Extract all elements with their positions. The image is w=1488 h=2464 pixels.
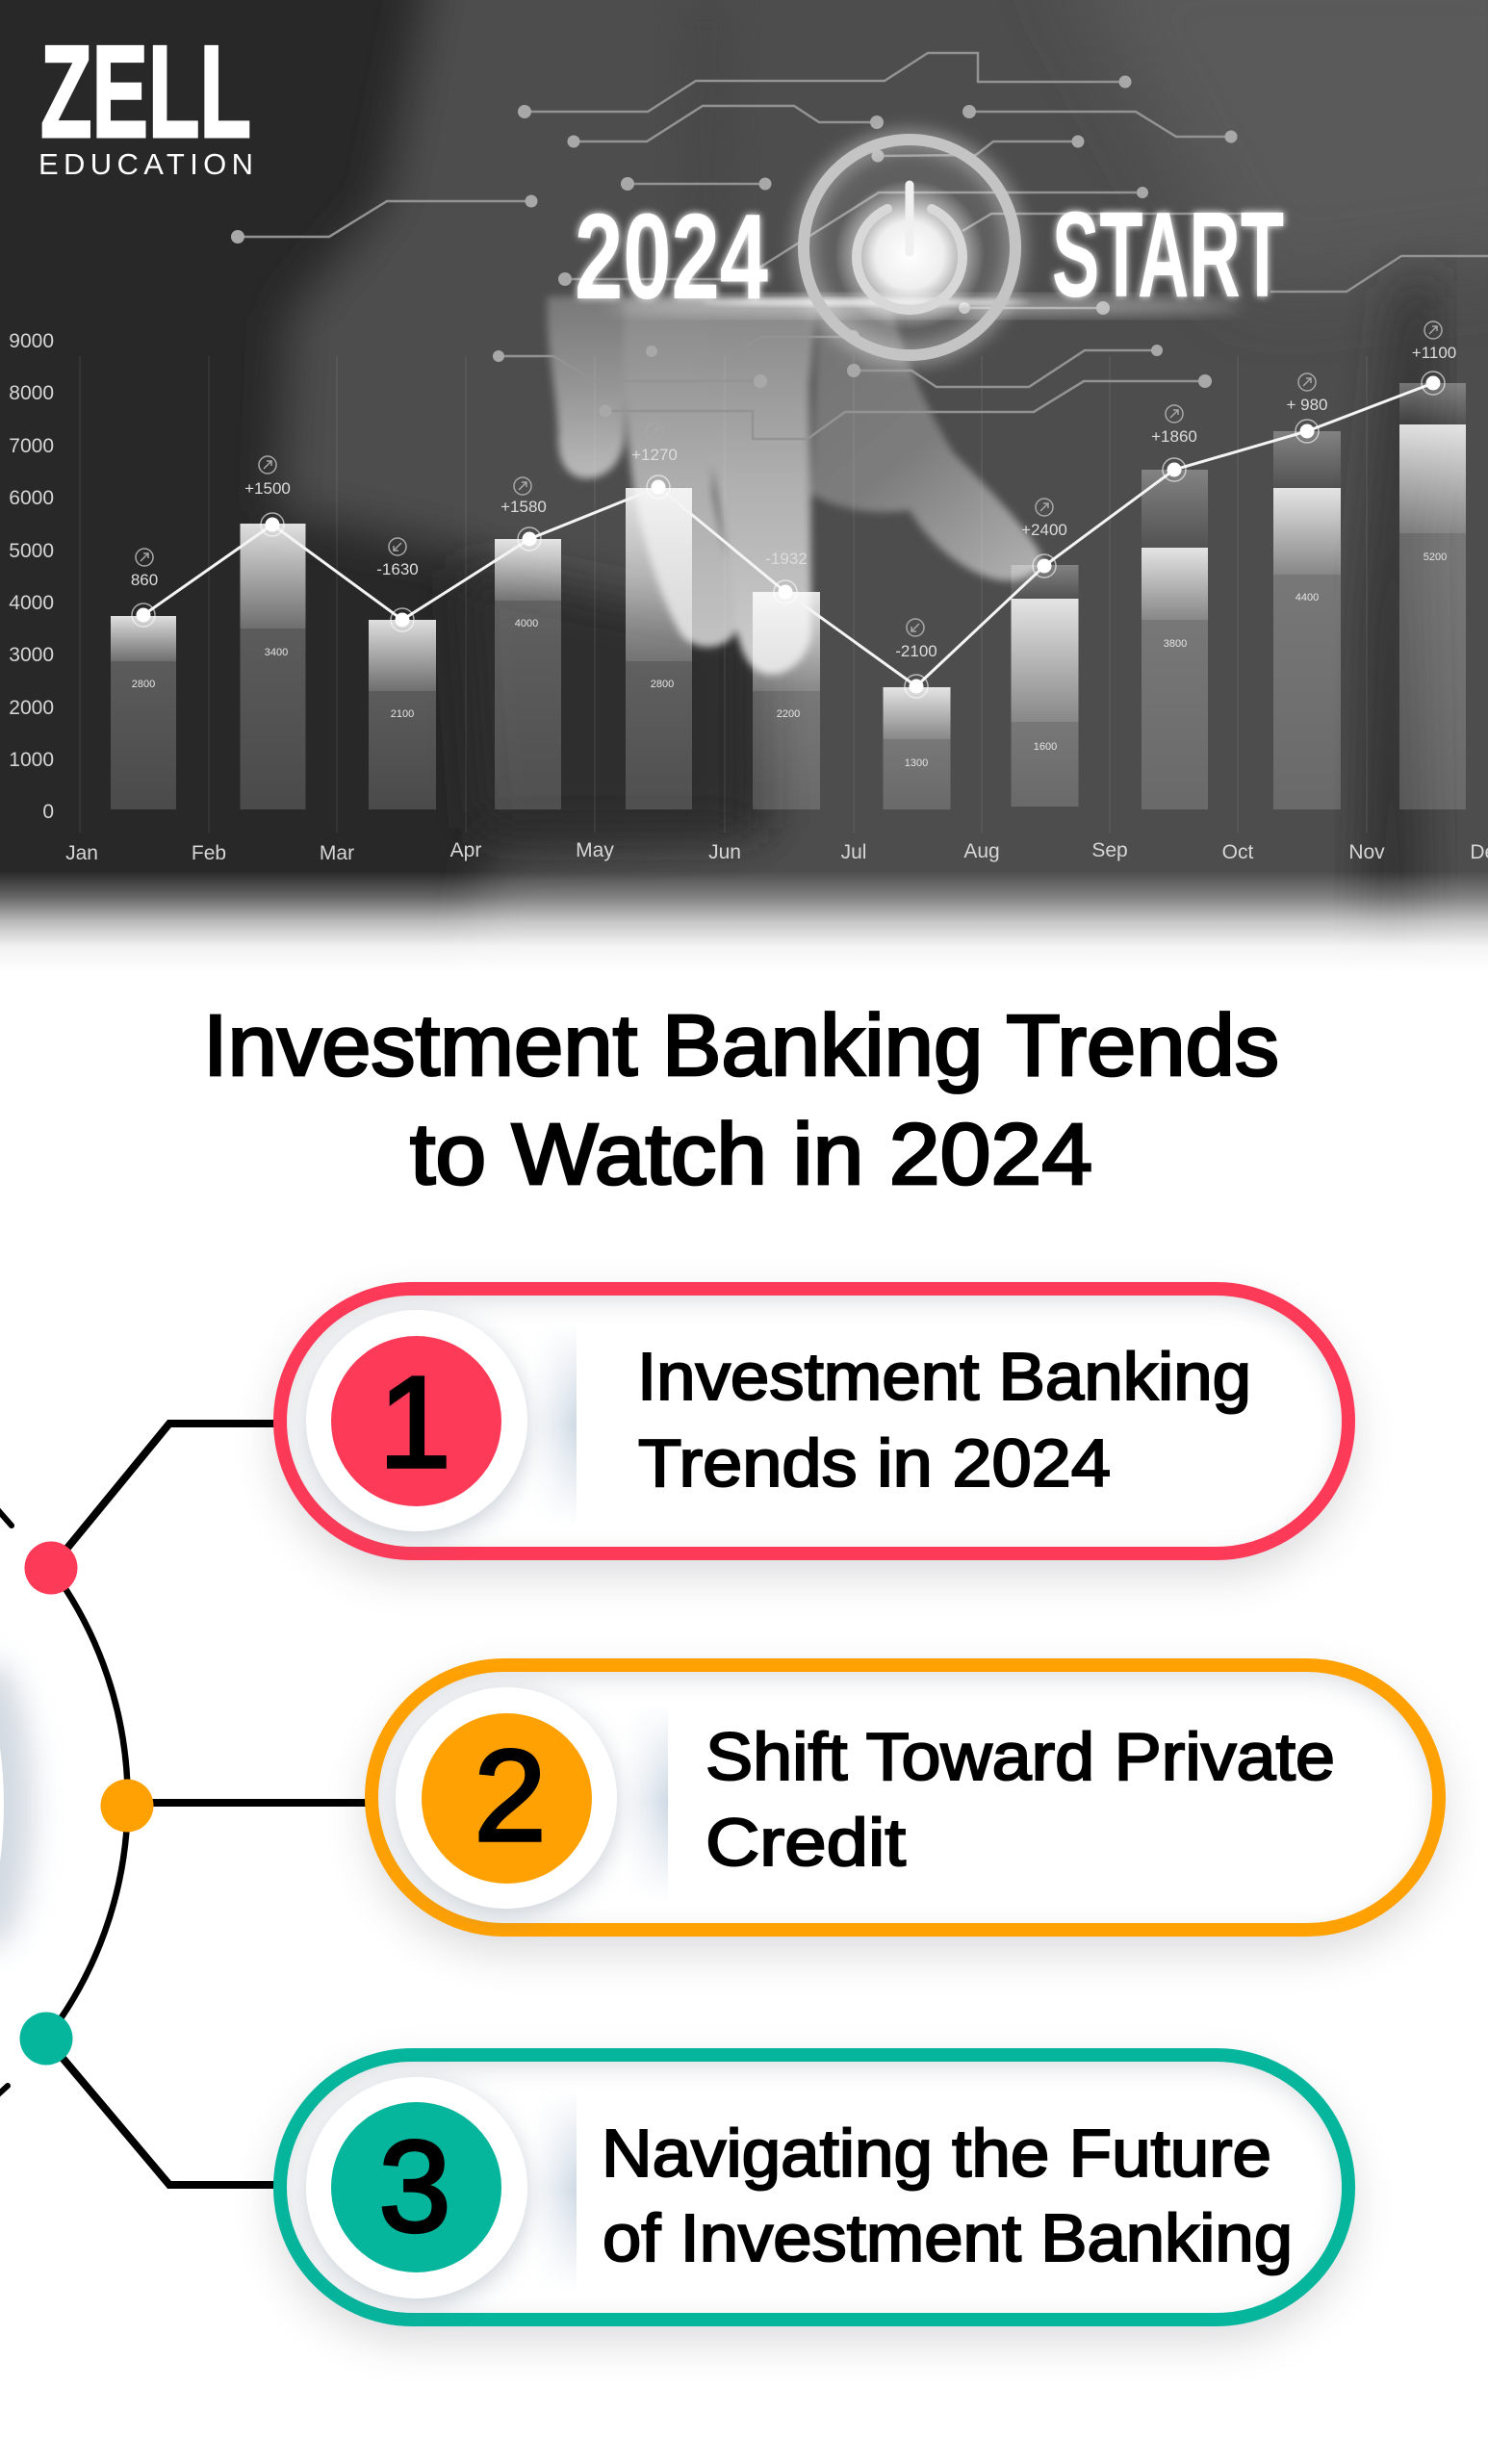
item 1 text [637, 1339, 1251, 1501]
change values: -1932 [765, 550, 808, 568]
bar values: 2800 [132, 679, 155, 690]
y axis labels: 5000 [9, 540, 54, 562]
change values: +1270 [631, 446, 678, 464]
bar values: 3400 [265, 647, 288, 658]
panel: item 1 [262, 1282, 1367, 1591]
bar values: 5200 [1424, 552, 1447, 563]
2024 START heading: START [1052, 187, 1284, 322]
bar values [132, 552, 1447, 769]
month labels: May [576, 839, 614, 861]
hub connectors and nodes [0, 1420, 366, 2189]
change values: +1580 [500, 498, 547, 516]
bar values: 3800 [1164, 638, 1187, 650]
title [203, 998, 1279, 1203]
item 2 text [706, 1719, 1335, 1880]
hero banner photo with chart [0, 0, 1488, 957]
number badge 3 [306, 2077, 527, 2298]
title: Investment Banking Trends [203, 998, 1279, 1094]
lens flare band [606, 297, 1242, 315]
change values: +1100 [1412, 344, 1456, 362]
month labels: Apr [450, 839, 481, 861]
dark backdrop [0, 0, 1488, 1001]
change values [131, 344, 1456, 660]
y axis labels: 7000 [9, 435, 54, 457]
sleeve and hand background [279, 0, 1488, 1020]
item 1 text: Investment Banking [637, 1339, 1251, 1414]
2024 START heading: 2024 [575, 189, 768, 324]
change values: +2400 [1021, 521, 1067, 539]
change values: + 980 [1286, 396, 1328, 414]
circuit nodes [231, 75, 1238, 418]
item 2 text: Credit [706, 1805, 906, 1880]
item 3 text: of Investment Banking [603, 2200, 1293, 2275]
month labels: Oct [1222, 841, 1253, 863]
number badge 1 [306, 1310, 527, 1531]
month labels: Aug [963, 840, 1000, 862]
y axis labels: 3000 [9, 644, 54, 666]
stacked bars [111, 383, 1466, 809]
connector lines [46, 1424, 371, 2185]
power button icon [804, 140, 1015, 355]
panel: item 3 [262, 2048, 1367, 2357]
item 3 text [602, 2116, 1293, 2275]
number badge 2: 2 [474, 1723, 547, 1868]
hub disc [0, 1641, 4, 1968]
month labels: Feb [192, 842, 226, 864]
month labels: Nov [1348, 841, 1385, 863]
panel: item 2 [352, 1658, 1457, 1967]
title: to Watch in 2024 [410, 1107, 1092, 1203]
change values: -1630 [376, 560, 419, 578]
circuit lines [238, 53, 1488, 439]
bar values: 2200 [777, 708, 800, 720]
y axis labels: 6000 [9, 487, 54, 509]
arc [46, 1568, 128, 2039]
logo: Zell Education: ZELL [40, 18, 251, 165]
y axis labels: 8000 [9, 382, 54, 404]
hub glow [0, 1660, 33, 1949]
number badge 3: 3 [378, 2114, 450, 2258]
bar values: 2800 [651, 679, 674, 690]
y axis labels: 0 [42, 801, 54, 823]
month labels: Mar [320, 842, 354, 864]
y axis labels: 4000 [9, 592, 54, 614]
month labels [65, 839, 1488, 864]
bar values: 4400 [1296, 592, 1319, 603]
trend line [132, 372, 1445, 698]
node: red [25, 1542, 77, 1594]
month labels: Jan [65, 842, 98, 864]
y axis labels [9, 330, 54, 823]
change values: +1500 [244, 479, 291, 498]
change values: -2100 [895, 642, 937, 660]
number badge 1: 1 [378, 1349, 450, 1495]
vertical grid lines [80, 356, 1367, 833]
change values: 860 [131, 571, 158, 589]
month labels: Jul [841, 841, 866, 863]
bar values: 2100 [391, 708, 414, 720]
2024 START heading [575, 187, 1284, 324]
item 3 text: Navigating the Future [602, 2116, 1271, 2191]
node: orange [100, 1779, 154, 1833]
month labels: Jun [708, 841, 741, 863]
bottom fade to white [0, 871, 1488, 1001]
bar values: 4000 [515, 618, 538, 629]
arrow badges above values [136, 321, 1442, 636]
pointing fingers [548, 296, 1040, 675]
bar values: 1600 [1034, 741, 1057, 753]
y axis labels: 1000 [9, 749, 54, 771]
change values: +1860 [1151, 427, 1197, 446]
y axis labels: 9000 [9, 330, 54, 352]
month labels: Sep [1091, 839, 1128, 861]
item 1 text: Trends in 2024 [638, 1425, 1111, 1501]
logo: Zell Education [38, 18, 253, 181]
item 2 text: Shift Toward Private [706, 1719, 1335, 1794]
arc stubs [0, 1510, 12, 2095]
node: teal [19, 2012, 73, 2066]
logo: Zell Education: EDUCATION [38, 147, 253, 181]
bar values: 1300 [905, 757, 928, 769]
number badge 2 [396, 1687, 617, 1909]
y axis labels: 2000 [9, 697, 54, 719]
